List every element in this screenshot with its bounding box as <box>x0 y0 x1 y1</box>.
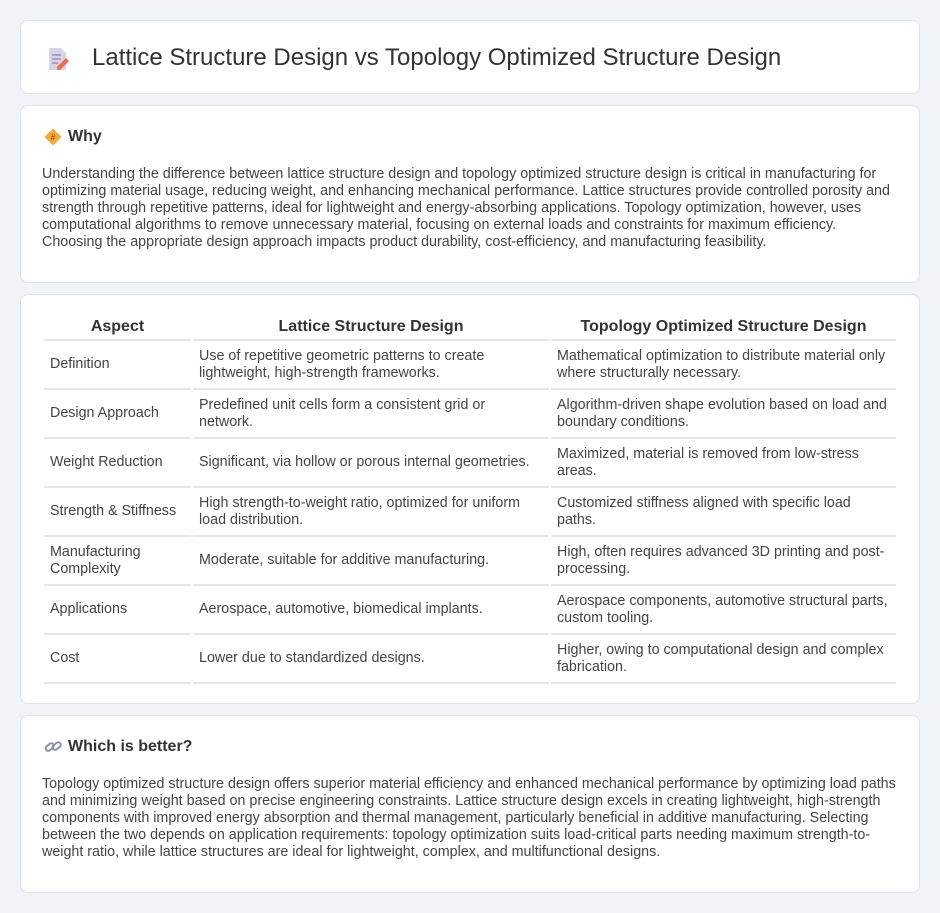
icon: link <box>44 741 62 752</box>
text: which is better: Topology optimized structure design offers superior material efficiency and enhanced mechanical performance by optimizing load paths and minimizing weight based on precise engineering constraints. Lattice structure design excels in creating lightweight, high-strength components with improved energy absorption and thermal management, particularly beneficial in additive manufacturing. Selecting between the two depends on application requirements: topology optimization suits load-critical parts needing maximum strength-to-weight ratio, while lattice structures are ideal for lightweight, complex, and multifunctional designs. <box>42 776 896 860</box>
table: Lattice Structure Design <box>279 318 463 335</box>
panel: comparison table <box>20 294 920 704</box>
panel: why <box>20 105 920 283</box>
icon: diamond <box>44 128 62 146</box>
table: Mathematical optimization to distribute material only where structurally necessary. <box>557 348 885 380</box>
heading: which is better: Which is better? <box>68 738 192 755</box>
table: Customized stiffness aligned with specific load paths. <box>557 494 851 528</box>
text: why: Understanding the difference between lattice structure design and topology optimized structure design is critical in manufacturing for optimizing material usage, reducing weight, and enhancing mechanical performance. Lattice structures provide controlled porosity and strength through repetitive patterns, ideal for lightweight and energy-absorbing applications. Topology optimization, however, uses computational algorithms to remove unnecessary material, focusing on external loads and constraints for maximum efficiency. Choosing the appropriate design approach impacts product durability, cost-efficiency, and manufacturing feasibility. <box>42 166 890 250</box>
table: Design Approach <box>50 405 159 421</box>
table: Aspect <box>91 318 144 335</box>
table: High strength-to-weight ratio, optimized for uniform load distribution. <box>199 494 520 528</box>
table: Significant, via hollow or porous internal geometries. <box>199 454 530 470</box>
table: Definition <box>50 356 110 372</box>
table: Aerospace, automotive, biomedical implants. <box>199 601 483 617</box>
table: Higher, owing to computational design and complex fabrication. <box>557 642 884 674</box>
table: Lower due to standardized designs. <box>199 650 425 666</box>
panel: header <box>20 20 920 94</box>
table <box>44 318 896 684</box>
table: Predefined unit cells form a consistent grid or network. <box>199 396 485 430</box>
table: Manufacturing Complexity <box>50 544 141 576</box>
table: Weight Reduction <box>50 454 163 470</box>
table: Maximized, material is removed from low-stress areas. <box>557 446 859 478</box>
title: Lattice Structure Design vs Topology Optimized Structure Design <box>92 44 781 71</box>
table: Topology Optimized Structure Design <box>581 318 866 335</box>
table: Aerospace components, automotive structural parts, custom tooling. <box>557 592 888 626</box>
table: High, often requires advanced 3D printing and post-processing. <box>557 544 884 576</box>
table: Applications <box>50 601 127 617</box>
icon: diamond: # <box>51 133 56 142</box>
table: Use of repetitive geometric patterns to create lightweight, high-strength frameworks. <box>199 348 484 380</box>
table: Moderate, suitable for additive manufacturing. <box>199 552 489 568</box>
heading: why: Why <box>68 128 102 145</box>
icon: document <box>49 48 69 70</box>
table: Cost <box>50 650 79 666</box>
panel: which is better <box>20 715 920 893</box>
table: Strength & Stiffness <box>50 503 176 519</box>
table: Algorithm-driven shape evolution based on load and boundary conditions. <box>557 396 887 430</box>
